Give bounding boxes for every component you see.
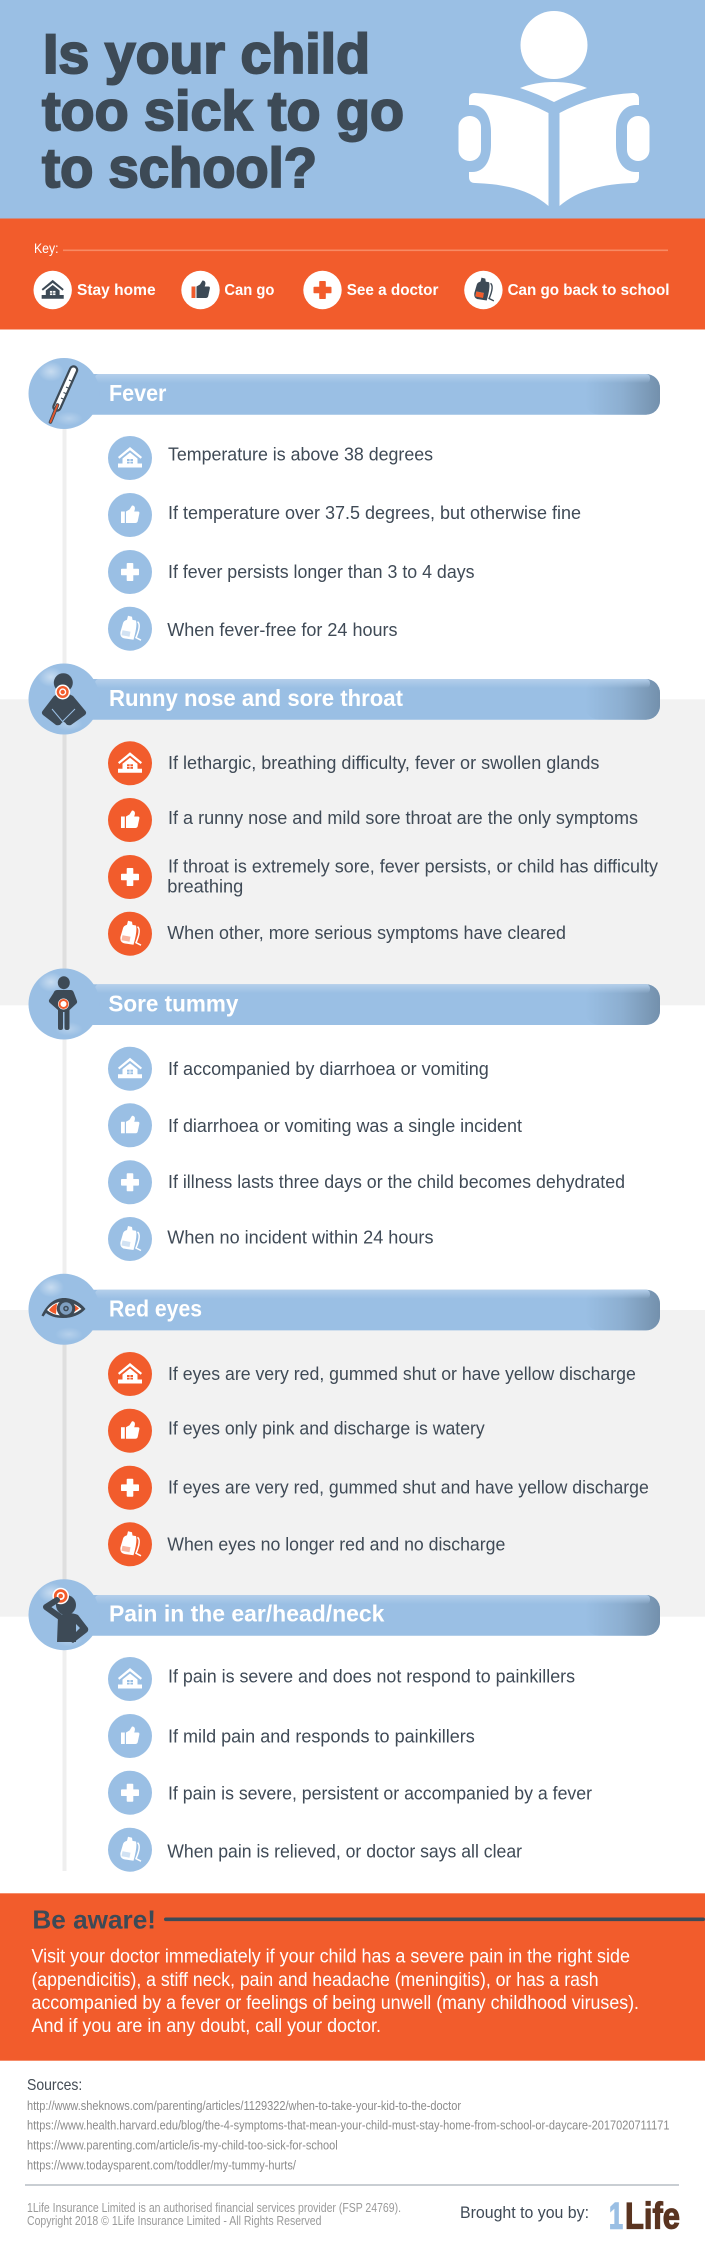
item: stay home xyxy=(108,1047,489,1091)
be aware text: accompanied by a fever or feelings of being unwell (many childhood viruses). xyxy=(32,1993,639,2014)
timeline xyxy=(62,425,66,1871)
title: Is your child xyxy=(43,22,370,85)
key: can go: Can go xyxy=(224,282,275,299)
item: see a doctor: If pain is severe, persistent or accompanied by a fever xyxy=(168,1783,592,1803)
item: can go xyxy=(108,493,581,537)
icon: person with head pain xyxy=(28,1579,100,1650)
item: back to school xyxy=(108,607,398,651)
item: see a doctor xyxy=(108,1160,625,1204)
key: stay home xyxy=(34,271,156,309)
header panel xyxy=(0,0,705,218)
heading bar: sore tummy: Sore tummy xyxy=(108,991,239,1017)
item: can go xyxy=(108,1103,522,1147)
icon: red eye xyxy=(28,1274,100,1345)
item: back to school: When other, more serious symptoms have cleared xyxy=(167,923,566,943)
item: back to school: When eyes no longer red and no discharge xyxy=(167,1535,505,1555)
item: stay home: If lethargic, breathing difficulty, fever or swollen glands xyxy=(168,753,599,773)
heading bar: red eyes xyxy=(70,1290,660,1330)
sources xyxy=(27,2077,670,2173)
item: can go: If a runny nose and mild sore throat are the only symptoms xyxy=(168,808,638,828)
item: can go xyxy=(108,1409,485,1453)
heading bar: sore tummy xyxy=(70,984,660,1025)
item: can go: If eyes only pink and discharge is watery xyxy=(168,1419,485,1439)
item: see a doctor: breathing xyxy=(167,877,243,897)
be aware heading: Be aware! xyxy=(32,1904,156,1934)
item: stay home xyxy=(108,741,599,785)
item: stay home: If accompanied by diarrhoea or vomiting xyxy=(168,1059,489,1079)
title: to school? xyxy=(42,136,317,199)
sources: https://www.parenting.com/article/is-my-child-too-sick-for-school xyxy=(27,2139,338,2153)
key heading: Key: xyxy=(34,241,58,256)
item: see a doctor xyxy=(108,1466,649,1510)
grey band: red eyes xyxy=(0,1310,705,1617)
item: stay home xyxy=(108,1352,636,1396)
icon: person with sore tummy xyxy=(28,968,100,1040)
panel: pain in the ear/head/neck xyxy=(28,1579,660,1872)
panel: fever xyxy=(28,358,660,651)
logo: 1Life: 1 xyxy=(609,2195,623,2236)
item: stay home: Temperature is above 38 degrees xyxy=(168,445,433,465)
item: see a doctor: If eyes are very red, gummed shut and have yellow discharge xyxy=(168,1477,649,1497)
item: can go xyxy=(108,798,638,842)
item: see a doctor xyxy=(108,550,474,594)
item: stay home: If pain is severe and does not respond to painkillers xyxy=(168,1667,575,1687)
be aware text xyxy=(32,1947,639,2037)
item: back to school xyxy=(108,1522,505,1566)
item: can go: If diarrhoea or vomiting was a single incident xyxy=(168,1116,522,1136)
legal text: Copyright 2018 © 1Life Insurance Limited - All Rights Reserved xyxy=(27,2214,322,2228)
item: back to school: When no incident within 24 hours xyxy=(167,1228,434,1248)
key: see a doctor: See a doctor xyxy=(347,282,438,299)
be aware text: (appendicitis), a stiff neck, pain and headache (meningitis), or has a rash xyxy=(32,1970,598,1991)
item: see a doctor: If fever persists longer than 3 to 4 days xyxy=(168,562,474,582)
panel: sore tummy xyxy=(28,968,660,1261)
be aware text: And if you are in any doubt, call your doctor. xyxy=(32,2016,381,2037)
heading bar: pain: Pain in the ear/head/neck xyxy=(109,1601,385,1627)
key: can go back to school xyxy=(464,271,670,309)
heading bar: red eyes: Red eyes xyxy=(109,1296,202,1322)
item: can go xyxy=(108,1714,475,1758)
item: see a doctor xyxy=(108,855,658,899)
item: back to school xyxy=(108,1828,522,1872)
item: stay home xyxy=(108,1657,575,1701)
item: back to school: When pain is relieved, or doctor says all clear xyxy=(167,1841,522,1861)
item: back to school xyxy=(108,912,566,956)
title: too sick to go xyxy=(42,79,404,142)
brought to you by: Brought to you by: xyxy=(460,2203,589,2222)
icon: thermometer xyxy=(28,358,100,429)
key: see a doctor xyxy=(303,271,438,309)
icon: child reading a book xyxy=(458,11,650,206)
legal text: 1Life Insurance Limited is an authorised financial services provider (FSP 24769). xyxy=(27,2201,401,2215)
heading bar: runny nose: Runny nose and sore throat xyxy=(109,685,403,711)
be aware text: Visit your doctor immediately if your child has a severe pain in the right side xyxy=(32,1947,630,1968)
icon: person with sore throat xyxy=(28,664,100,734)
item: stay home xyxy=(108,436,433,480)
heading bar: pain xyxy=(70,1595,660,1636)
logo: 1Life: Life xyxy=(625,2195,680,2236)
heading bar: fever xyxy=(70,374,660,415)
sources: https://www.todaysparent.com/toddler/my-tummy-hurts/ xyxy=(27,2159,296,2173)
legal text xyxy=(27,2201,401,2228)
panel: key xyxy=(0,218,705,330)
panel: be aware xyxy=(0,1893,705,2061)
key: can go xyxy=(181,271,275,309)
sources: Sources: xyxy=(27,2077,82,2094)
panel: red eyes xyxy=(28,1274,660,1566)
item: stay home: If eyes are very red, gummed shut or have yellow discharge xyxy=(168,1364,636,1384)
item: back to school: When fever-free for 24 hours xyxy=(167,620,398,640)
heading bar: runny nose xyxy=(70,679,660,720)
item: can go: If temperature over 37.5 degrees, but otherwise fine xyxy=(168,503,581,523)
item: see a doctor: If throat is extremely sore, fever persists, or child has difficulty xyxy=(168,857,658,877)
title xyxy=(42,22,404,199)
panel: runny nose and sore throat xyxy=(28,664,660,956)
item: see a doctor xyxy=(108,1771,592,1815)
item: see a doctor: If illness lasts three days or the child becomes dehydrated xyxy=(168,1172,625,1192)
key: stay home: Stay home xyxy=(77,282,156,299)
sources: http://www.sheknows.com/parenting/articles/1129322/when-to-take-your-kid-to-the-doctor xyxy=(27,2099,461,2113)
grey band: runny nose xyxy=(0,699,705,1005)
item: back to school xyxy=(108,1217,434,1261)
logo: 1Life xyxy=(609,2195,680,2236)
item: can go: If mild pain and responds to painkillers xyxy=(168,1727,475,1747)
key: can go back to school: Can go back to school xyxy=(508,282,670,299)
heading bar: fever: Fever xyxy=(109,380,166,406)
